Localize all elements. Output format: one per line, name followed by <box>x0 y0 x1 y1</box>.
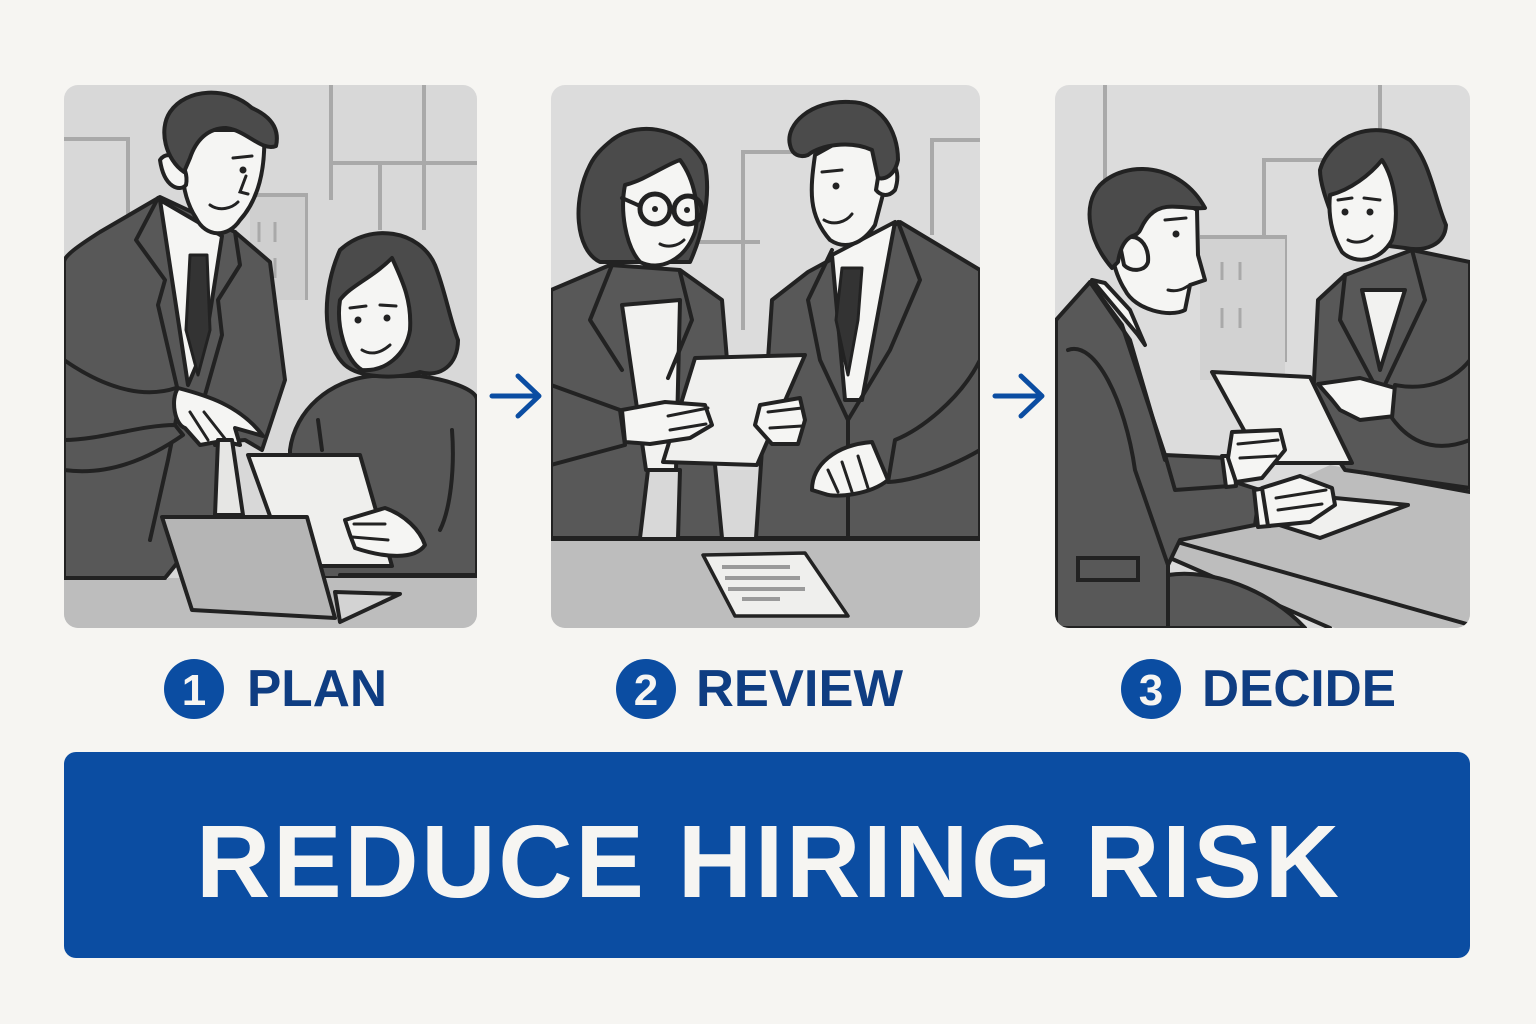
woman hand <box>345 508 425 556</box>
step label: 2 review <box>616 659 904 719</box>
held paper <box>1212 372 1352 463</box>
document on desk <box>703 553 848 616</box>
man with tie <box>756 102 980 538</box>
step label: 3 decide: 3 <box>1139 666 1163 715</box>
banner: reduce hiring risk <box>64 752 1470 958</box>
step label: 1 plan: PLAN <box>247 660 387 718</box>
laptop <box>162 517 400 622</box>
step label: 2 review: REVIEW <box>696 660 904 718</box>
arrow: plan to review <box>492 376 539 416</box>
panel: plan illustration <box>64 85 477 628</box>
woman seated <box>290 233 477 578</box>
step label: 3 decide: DECIDE <box>1202 660 1396 718</box>
paper on desk <box>1270 498 1408 538</box>
desk <box>1170 465 1470 628</box>
step label: 3 decide <box>1121 659 1396 719</box>
paper held <box>663 355 805 465</box>
seated man <box>1056 169 1335 628</box>
step label: 2 review: 2 <box>634 666 658 715</box>
document on desk <box>248 455 392 566</box>
panel: review illustration <box>551 85 980 628</box>
panel: decide illustration <box>1055 85 1470 628</box>
banner: reduce hiring risk: REDUCE HIRING RISK <box>196 804 1339 919</box>
woman with glasses <box>551 126 729 537</box>
hands holding paper <box>622 398 805 444</box>
man standing <box>64 93 285 578</box>
woman standing <box>1312 130 1470 488</box>
arrow: review to decide <box>995 376 1042 416</box>
step label: 1 plan: 1 <box>182 666 206 715</box>
step label: 1 plan <box>164 659 387 719</box>
